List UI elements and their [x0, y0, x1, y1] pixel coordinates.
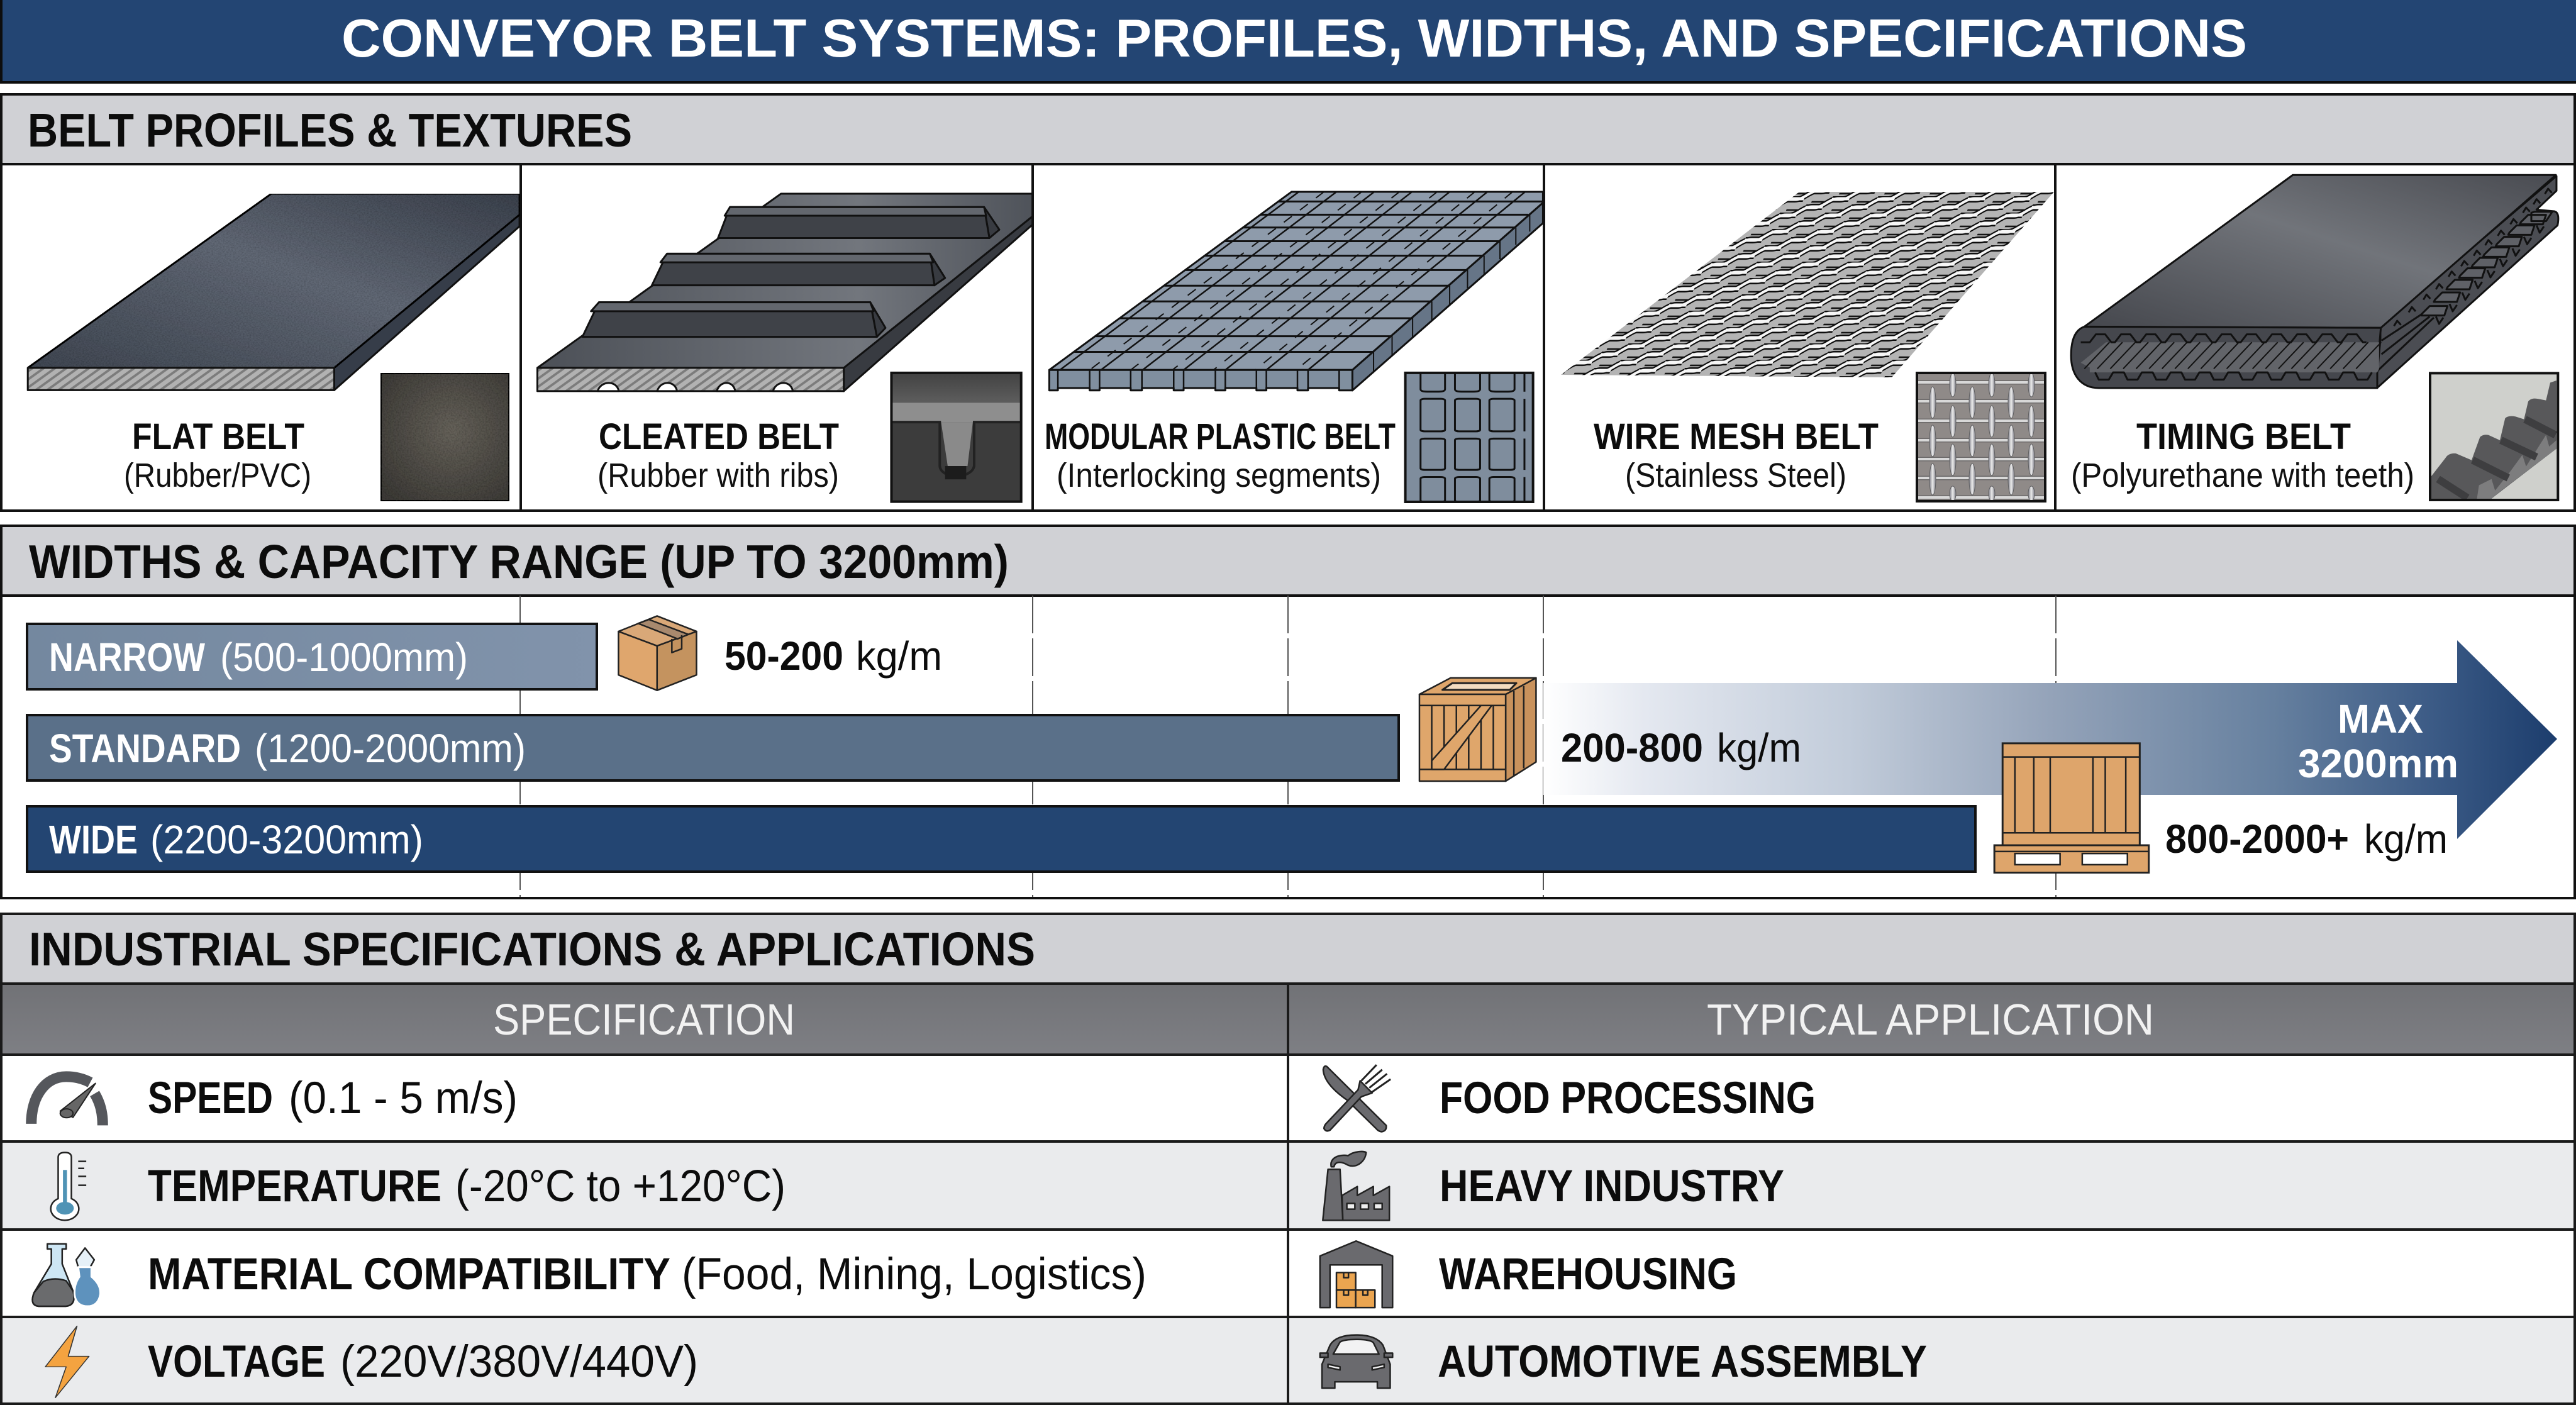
capacity: 50-200 kg/m: 50-200: [724, 633, 843, 679]
bar: wide: (2200-3200mm): [150, 817, 423, 862]
table header: [0, 985, 2576, 1054]
label: flat belt: (Rubber/PVC): [124, 457, 311, 494]
row: speed: [148, 1074, 518, 1123]
label: wire mesh belt: WIRE MESH BELT: [1594, 416, 1879, 457]
icon: wooden crate: [1419, 678, 1536, 781]
arrow: max 3200mm: [1543, 640, 2557, 839]
label: cleated belt: CLEATED BELT: [599, 416, 839, 457]
belt side with teeth: [2376, 176, 2558, 388]
label: cleated belt: [597, 416, 839, 494]
icon: knife and fork: [1323, 1065, 1391, 1132]
icon: warehouse: [1320, 1241, 1392, 1308]
label: wire mesh belt: [1594, 416, 1879, 494]
bar: standard: STANDARD: [49, 726, 241, 771]
row: temperature: TEMPERATURE: [148, 1162, 441, 1211]
swatch: modular texture: [1406, 373, 1533, 502]
label: cleated belt: (Rubber with ribs): [597, 457, 839, 494]
swatch: cleated texture: [891, 373, 1021, 502]
row: voltage: (220V/380V/440V): [340, 1337, 698, 1387]
row: material compatibility: (Food, Mining, Logistics): [682, 1250, 1146, 1299]
row: material compatibility: [148, 1250, 1146, 1299]
label: modular plastic belt: MODULAR PLASTIC BELT: [1045, 416, 1396, 457]
bar: standard: (1200-2000mm): [255, 726, 526, 771]
panel: belt profiles and textures: [1, 94, 2575, 511]
bar: narrow: NARROW: [49, 635, 205, 680]
row: speed: SPEED: [148, 1074, 273, 1123]
row: food processing: FOOD PROCESSING: [1440, 1074, 1816, 1123]
panel: industrial specifications and applications: [0, 914, 2576, 1405]
bar: wide: [27, 806, 1975, 872]
icon: factory: [1323, 1152, 1389, 1220]
icon: car: [1320, 1335, 1392, 1388]
row: speed: (0.1 - 5 m/s): [289, 1074, 518, 1123]
bar: narrow: (500-1000mm): [220, 635, 468, 680]
heading: widths: WIDTHS & CAPACITY RANGE (UP TO 3200mm): [29, 535, 1009, 588]
belt: modular plastic: [1049, 192, 1543, 391]
icon: speed gauge: [31, 1077, 103, 1125]
label: wire mesh belt: (Stainless Steel): [1625, 457, 1846, 494]
capacity: 200-800 kg/m: [1561, 725, 1801, 770]
panel: widths and capacity range: [1, 526, 2575, 898]
label: timing belt: TIMING BELT: [2136, 416, 2351, 457]
table header: TYPICAL APPLICATION: [1707, 995, 2154, 1044]
row: temperature: (-20°C to +120°C): [455, 1162, 786, 1211]
belt top and front face: [2071, 175, 2556, 388]
label: modular plastic belt: (Interlocking segments): [1057, 457, 1381, 494]
row: material compatibility: MATERIAL COMPATIBILITY: [148, 1250, 670, 1299]
label: timing belt: (Polyurethane with teeth): [2071, 457, 2414, 494]
swatch: timing texture: [2430, 373, 2558, 500]
capacity: 200-800 kg/m: 200-800: [1561, 725, 1703, 770]
row: voltage: [148, 1337, 698, 1387]
swatch: flat texture: [380, 373, 509, 501]
row: automotive assembly: AUTOMOTIVE ASSEMBLY: [1438, 1337, 1927, 1387]
capacity: 800-2000+ kg/m: 800-2000+: [2165, 816, 2349, 862]
row: heavy industry: HEAVY INDUSTRY: [1440, 1162, 1784, 1211]
icon: cardboard box: [618, 616, 696, 691]
icon: thermometer: [51, 1152, 86, 1220]
row: warehousing: WAREHOUSING: [1439, 1250, 1737, 1299]
bar: narrow: [27, 624, 597, 689]
heading: belt profiles: BELT PROFILES & TEXTURES: [28, 104, 632, 157]
swatch: wire mesh texture: [1917, 373, 2045, 501]
icon: voltage bolt: [45, 1326, 89, 1397]
label: flat belt: [124, 416, 311, 494]
belt: cleated: [537, 194, 1033, 391]
belt: flat: [28, 194, 519, 390]
row: temperature: [148, 1162, 786, 1211]
icon: crate on pallet: [1994, 743, 2149, 873]
capacity: 50-200 kg/m: [724, 633, 942, 679]
heading: specifications: INDUSTRIAL SPECIFICATIONS & APPLICATIONS: [29, 923, 1035, 975]
icon: flask and drop: [33, 1244, 101, 1306]
title bar: [0, 0, 2576, 84]
capacity: 800-2000+ kg/m: [2165, 816, 2448, 862]
capacity: 50-200 kg/m: kg/m: [856, 633, 942, 679]
belt: wire mesh: [1553, 189, 2057, 384]
label: flat belt: FLAT BELT: [132, 416, 304, 457]
capacity: 200-800 kg/m: kg/m: [1717, 725, 1801, 770]
bar: standard: [27, 715, 1399, 780]
capacity: 800-2000+ kg/m: kg/m: [2364, 816, 2448, 862]
table header: SPECIFICATION: [493, 995, 795, 1044]
belt: timing: [2071, 175, 2558, 388]
title: CONVEYOR BELT SYSTEMS: PROFILES, WIDTHS, AND SPECIFICATIONS: [341, 9, 2247, 69]
bar: wide: WIDE: [49, 817, 138, 862]
label: modular plastic belt: [1045, 416, 1396, 494]
label: timing belt: [2071, 416, 2414, 494]
label: max: [2298, 696, 2458, 786]
label: max: 3200mm: [2298, 741, 2458, 786]
label: max: MAX: [2338, 696, 2423, 741]
row: voltage: VOLTAGE: [148, 1337, 325, 1387]
